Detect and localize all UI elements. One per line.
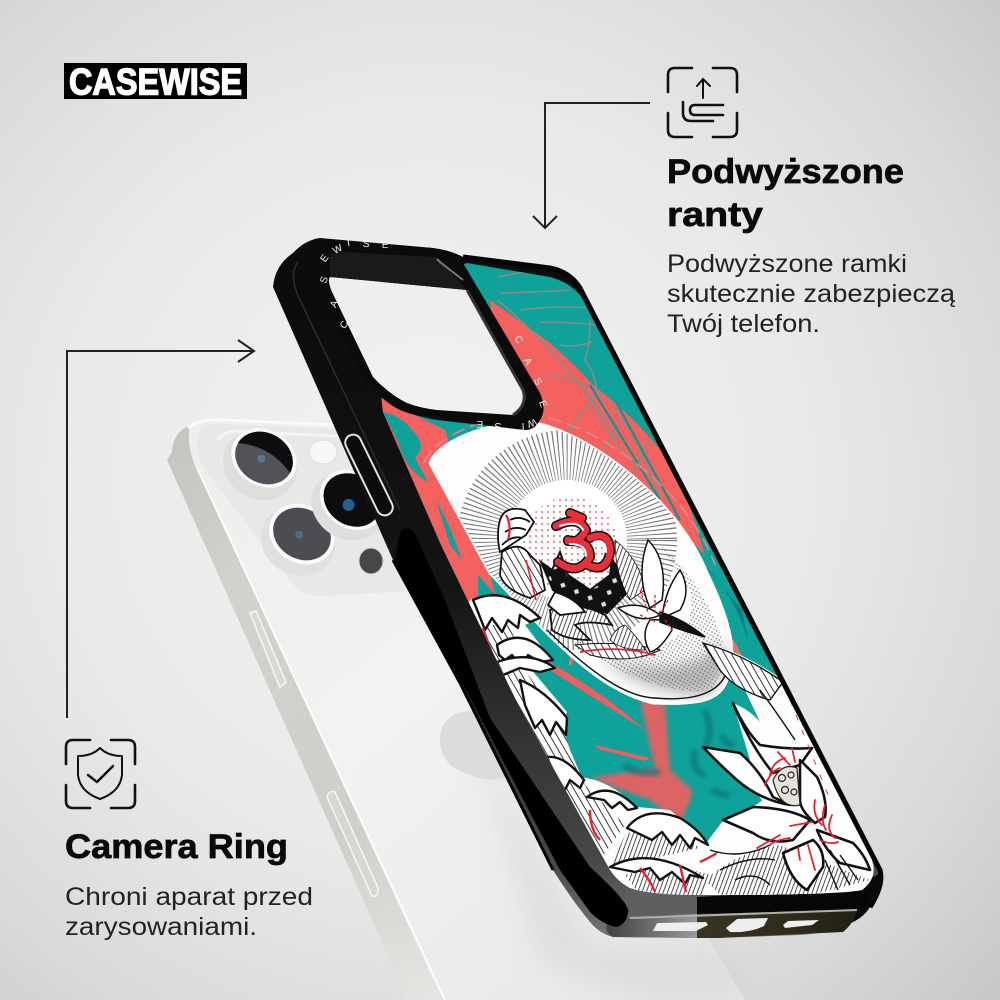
white iPhone behind the case [167, 416, 760, 1000]
camera plateau with lenses [197, 415, 430, 596]
black phone case [273, 238, 882, 938]
arrow to camera ring [67, 340, 254, 718]
ring lettering: E [476, 418, 484, 429]
dark outer edge [393, 560, 553, 870]
ring lettering: W [525, 416, 538, 429]
text: raised edges description: Podwyższone ramki [667, 250, 907, 278]
coral strip right of the moon [732, 637, 742, 656]
stippled moon surface [570, 545, 723, 692]
printed case artwork [381, 263, 874, 895]
heading: camera ring: Camera Ring [65, 828, 288, 866]
sun rays [482, 455, 652, 625]
flash [309, 440, 337, 464]
right edge [463, 257, 881, 907]
lens bottom [248, 490, 349, 589]
ring lettering: C [338, 319, 351, 331]
icon: shield with check [66, 740, 135, 808]
ring lettering: A [328, 299, 341, 309]
arrow to raised edges [533, 103, 650, 228]
ring lettering: C [512, 334, 525, 346]
text: raised edges description [667, 250, 955, 338]
lotus seed pod [773, 766, 800, 806]
bottom cutouts [653, 922, 708, 931]
logo: CASEWISE [69, 62, 242, 102]
coral and teal splashes left of the moon [375, 395, 500, 610]
small lotus on moon [610, 540, 705, 652]
lotus stamens [757, 748, 838, 870]
ring lettering: S [362, 239, 370, 250]
coral splash in lower teal [548, 656, 695, 820]
big lotus flower [700, 643, 880, 900]
side button upper [250, 611, 286, 688]
om symbol [556, 513, 610, 568]
ring lettering: I [522, 420, 525, 431]
olive lower edge [697, 910, 857, 938]
text: camera ring description [65, 883, 313, 941]
coral leaf shape [490, 300, 705, 555]
ring lettering: W [331, 242, 345, 257]
white waves along left edge [460, 595, 800, 900]
lens right [298, 455, 399, 555]
ring lettering: S [531, 376, 544, 388]
ring lettering: A [521, 356, 534, 368]
translucent gray lower-left section [625, 888, 697, 917]
text: raised edges description: Twój telefon. [667, 310, 820, 338]
shadow cast by the case [470, 720, 760, 1000]
camera ring of the case [305, 238, 549, 431]
ring lettering: E [536, 399, 549, 409]
starry black mountain [541, 552, 634, 613]
ring lettering: E [319, 252, 332, 264]
ring lettering: S [318, 275, 331, 285]
ring lettering: S [494, 420, 501, 431]
ring lettering: E [381, 240, 389, 251]
lens top [210, 415, 311, 513]
dark teal swirls [625, 710, 735, 795]
black bottom band [697, 887, 878, 914]
ring lettering: I [346, 238, 351, 249]
white moon panel [424, 416, 732, 703]
icon: raised edges [668, 68, 737, 137]
wave crest near the sun [498, 509, 545, 600]
leaf from moon [703, 643, 783, 700]
side slot [395, 528, 628, 927]
apple logo on phone back [440, 711, 505, 779]
case side button [343, 432, 395, 518]
heading: raised edges [667, 153, 904, 234]
text: camera ring description: Chroni aparat przed [65, 883, 313, 911]
text: camera ring description: zarysowaniami. [65, 913, 257, 941]
lidar [359, 548, 383, 574]
heading: raised edges: Podwyższone [667, 153, 904, 191]
heading: raised edges: ranty [667, 196, 763, 234]
leaf veins [497, 270, 660, 500]
ring lettering [318, 238, 549, 431]
text: raised edges description: skutecznie zabezpieczą [667, 280, 955, 308]
side button lower [327, 792, 378, 896]
wave hatching [480, 625, 625, 860]
lower-centre waves [548, 592, 660, 659]
